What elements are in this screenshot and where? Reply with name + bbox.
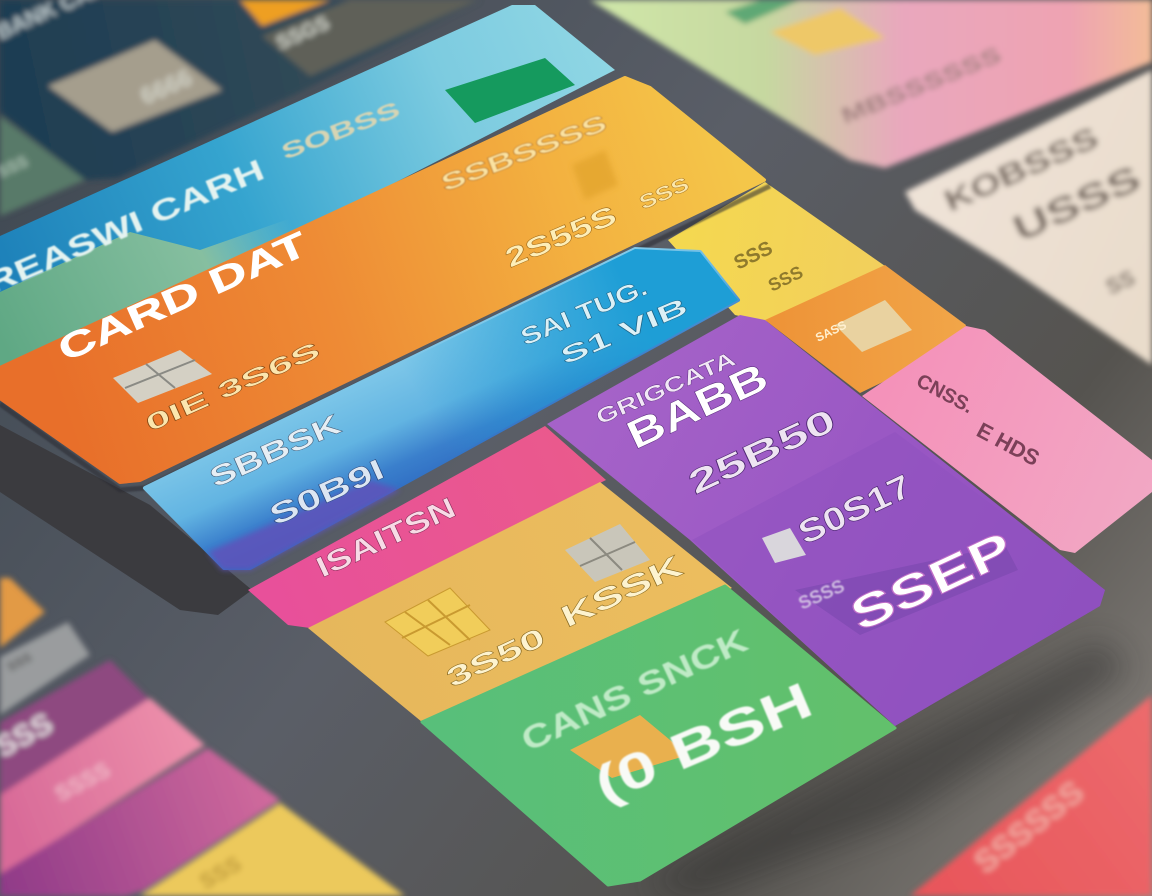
- number: 0IE 3S6S: [141, 336, 324, 437]
- card: pastel top right: [590, 0, 1152, 168]
- gold chip: [570, 715, 688, 778]
- big white text: (0 BSH: [586, 672, 820, 813]
- card: dark navy top left: SSGS: [273, 12, 333, 55]
- shadow below orange card: [0, 186, 770, 490]
- lower label: 2S55S: [501, 200, 621, 274]
- card: teal blue: [0, 5, 615, 385]
- card: bottom left orange: [0, 578, 45, 648]
- card: yellow: SSS: [765, 262, 806, 296]
- large white logo text: SSEP: [842, 521, 1020, 641]
- card: gold: [308, 482, 732, 722]
- silver chip: [565, 524, 650, 582]
- card: pink right: [862, 326, 1152, 553]
- card: cream right: SS: [1102, 265, 1139, 300]
- card: orange small with chip: [765, 265, 966, 393]
- card: dark card beneath stack: [0, 425, 252, 615]
- card: purple main: [547, 315, 1105, 726]
- card: cream right: USSS: [1007, 157, 1147, 249]
- group: blurred background cards bottom: [0, 578, 1152, 896]
- text upper: KSSK: [556, 549, 688, 634]
- purple corner: [208, 480, 400, 570]
- upper text: SBBSK: [205, 408, 345, 493]
- card: bottom left purple and pink: SSSS: [51, 757, 114, 806]
- title: CARD DAT: [52, 225, 313, 369]
- small heading: GRIGCATA: [593, 348, 739, 430]
- upper label: CANS SNCK: [516, 622, 753, 758]
- upper label: SSBSSSS: [437, 110, 611, 198]
- card: yellow: [668, 182, 885, 322]
- card label: SOBSS: [278, 97, 403, 165]
- hologram: [572, 150, 618, 200]
- card: bottom left purple and pink: [0, 660, 205, 876]
- lower text: S0B9I: [265, 454, 389, 532]
- card: dark navy top left: 6666: [136, 64, 196, 110]
- card: orange main: [0, 78, 764, 482]
- card: cream right: [905, 70, 1152, 365]
- card: pastel top right: MBSSSSSS: [838, 42, 1004, 129]
- large heading: BABB: [620, 355, 775, 458]
- card: cream right: KOBSSS: [939, 121, 1104, 218]
- second number with chip: [762, 467, 917, 563]
- card: bottom left yellow: SSS: [195, 851, 246, 894]
- card: bottom left yellow: [140, 803, 405, 896]
- card: pink lower: [248, 426, 606, 628]
- small strip text: SSSS: [795, 576, 848, 614]
- card: pink right: E HDS: [973, 417, 1044, 471]
- group: blurred background cards top: [0, 0, 1152, 365]
- dark label strip: [795, 545, 1018, 635]
- card: pink right: CNSS.: [913, 370, 977, 418]
- card: muted green left: [0, 116, 85, 216]
- gold chip: [385, 588, 490, 656]
- chip: [113, 350, 212, 403]
- card: bottom left magenta: [0, 748, 280, 896]
- right text two: S1 VIB: [557, 293, 692, 371]
- card: bottom left grey: [0, 622, 90, 715]
- card: blue main: [145, 249, 738, 570]
- right text one: SAI TUG.: [517, 274, 652, 352]
- card: bottom left grey: SSS: [4, 649, 35, 675]
- text lower: 3S50: [442, 622, 550, 693]
- card: orange small with chip: SASS: [813, 318, 849, 345]
- label: ISAITSN: [311, 492, 461, 584]
- card: green: [422, 586, 895, 885]
- shadow under main stack: [640, 640, 1130, 896]
- darker lower band: [692, 432, 1105, 726]
- second number with chip: S0S17: [792, 467, 917, 551]
- small label: SSS: [636, 173, 693, 215]
- card: yellow: SSS: [731, 237, 776, 274]
- card: bottom right red: SSSSSS: [967, 773, 1090, 881]
- number: 25B50: [682, 401, 841, 501]
- green stripe: [445, 58, 575, 123]
- card: dark navy top left: [0, 0, 480, 180]
- card: bottom right red: [910, 695, 1152, 896]
